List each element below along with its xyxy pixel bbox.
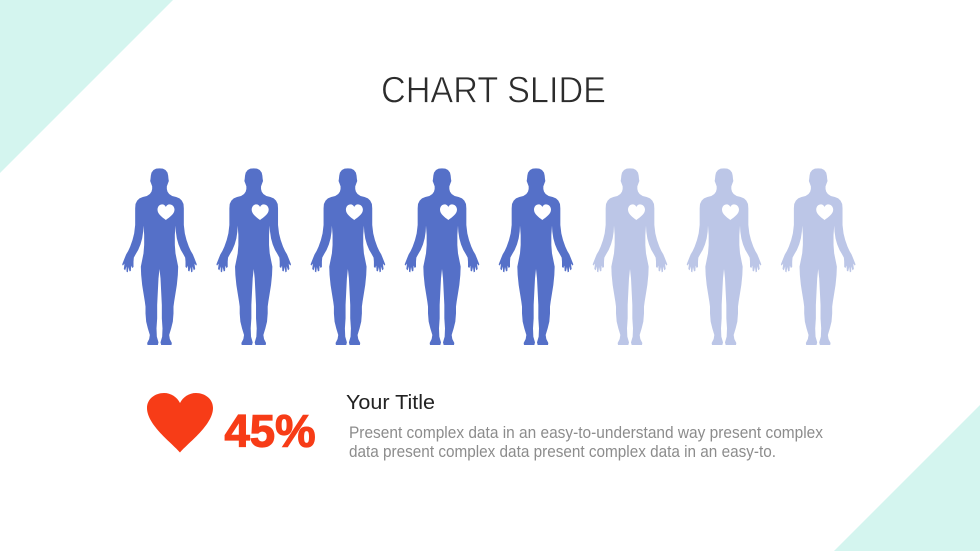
- title: CHART SLIDE: [381, 68, 606, 110]
- figure 1: highlighted: [122, 168, 197, 345]
- figure 5: highlighted: [499, 168, 573, 345]
- figure 7: muted: [687, 168, 761, 345]
- body text: [349, 424, 824, 461]
- figure 6: muted: [593, 168, 667, 345]
- icon: red heart: [147, 393, 213, 452]
- pictogram row: 5 of 8 highlighted: [122, 168, 856, 345]
- body text: data present complex data present complex data in an easy-to.: [349, 443, 776, 461]
- corner triangle: bottom right: [834, 405, 980, 551]
- figure 2: highlighted: [216, 168, 291, 345]
- corner triangle: top left: [0, 0, 173, 173]
- subheading: Your Title: [346, 392, 435, 414]
- figure 4: highlighted: [405, 168, 479, 345]
- figure 8: muted: [781, 168, 856, 345]
- body text: Present complex data in an easy-to-understand way present complex: [349, 424, 824, 442]
- statistic: 45%: 45%: [224, 406, 316, 456]
- figure 3: highlighted: [311, 168, 385, 345]
- text block: description: [346, 392, 824, 461]
